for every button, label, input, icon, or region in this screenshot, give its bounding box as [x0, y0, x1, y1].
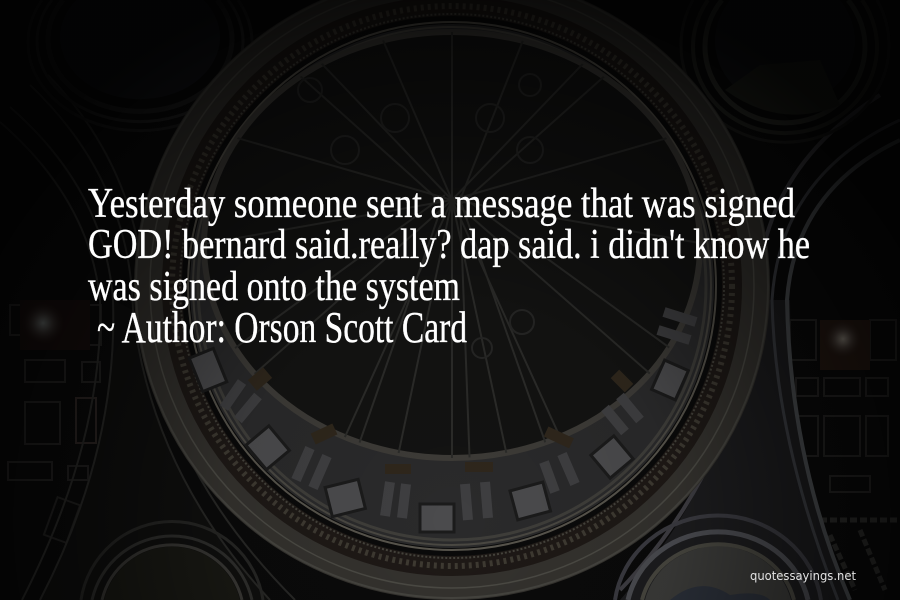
medallion: bottom left — [81, 522, 263, 600]
dome panel ornaments — [298, 74, 543, 358]
beaded band — [172, 6, 732, 566]
cornice rings — [188, 22, 716, 550]
author attribution: ~ Author: Orson Scott Card — [97, 303, 467, 352]
quote line 3: was signed onto the system — [88, 264, 460, 310]
dome interior — [204, 32, 700, 458]
side panels — [8, 305, 900, 595]
dome ribs — [204, 35, 700, 458]
watermark: quotessayings.net — [750, 569, 856, 583]
drum pilasters — [224, 312, 696, 520]
ceiling light right — [823, 319, 863, 359]
dome outer band — [152, 0, 752, 582]
medallion: top right — [681, 0, 889, 142]
drum crescent — [190, 24, 714, 548]
drum windows — [189, 348, 688, 532]
gilded capitals — [248, 367, 633, 474]
medallion: bottom right — [615, 516, 821, 600]
medallion: top left — [28, 0, 252, 131]
quote text — [88, 181, 810, 310]
ceiling light left — [21, 301, 65, 345]
spandrel fills — [620, 300, 850, 600]
